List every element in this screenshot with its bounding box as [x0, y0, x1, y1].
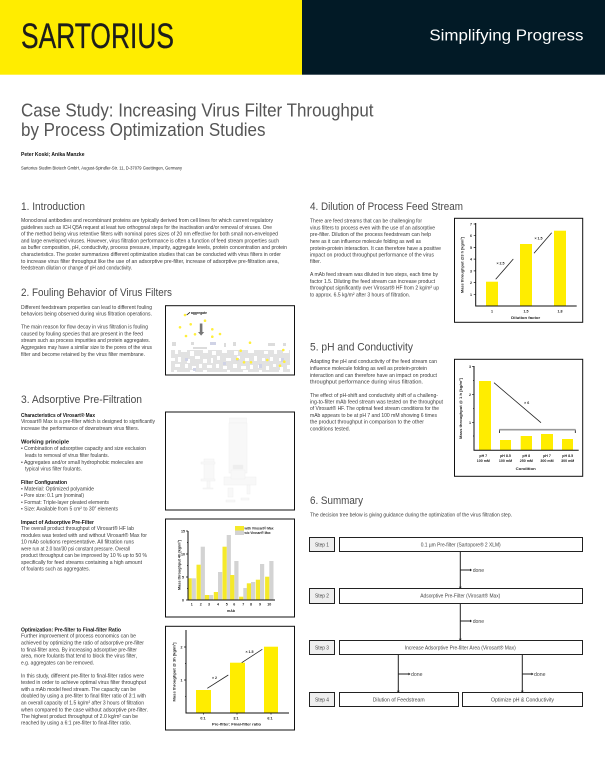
chart axes: pH 8: [522, 454, 530, 458]
section 2 text: Aggregates may have a similar size to the pores of the virus: [21, 345, 152, 351]
chart bars: [479, 381, 573, 450]
annotation: fold increases: × 1.5: [534, 236, 543, 240]
chart axes: pH 7: [479, 454, 487, 458]
section 3 text: filter configuration: • Size: Available from 5 cm² to 30″ elements: [21, 506, 118, 512]
section 3 text: optimization: achieved by optimizing the ratio of adsorptive pre-filter: [21, 640, 144, 646]
section 2 text: behaviors being observed during virus filtration operations.: [21, 312, 152, 318]
section 1 text: feedstream dilution or change of pH and conductivity.: [21, 266, 132, 272]
chart axes: 6:1: [267, 716, 273, 720]
chart axes: [172, 630, 289, 726]
chart axes: 0:1: [200, 716, 206, 720]
section 3 text: working principle: • Combination of adsorptive capacity and size exclusion: [21, 446, 146, 452]
section 1 text: and large enveloped viruses. However, virus filtration performance is often a function of feed stream properties such: [21, 238, 279, 244]
annotation: six-fold bracket: × 6: [524, 401, 529, 405]
step 2 label: [310, 588, 334, 604]
chart axes: pH 7: [543, 454, 551, 458]
chart axes: 3: [469, 365, 471, 369]
section 5 text: interaction and can therefore have an impact on product: [310, 373, 437, 379]
arrow: step 1 to step 2: done: [473, 568, 484, 574]
panel: fouling diagram: [166, 306, 294, 375]
section 5 text: ing-to-filter mAb feed stream was tested on the throughput: [310, 399, 444, 405]
section 1 text: of the method being virus retentive filters with nominal pores sizes of 20 nm effective for both small non-enveloped: [21, 232, 278, 238]
section 3 text: filter configuration: • Format: Triple-layer pleated elements: [21, 500, 109, 506]
section 3 text: impact: specifically for feed streams containing a high amount: [21, 560, 142, 566]
section 6 intro text: The decision tree below is giving guidance during the optimization of the virus filtration step.: [310, 512, 512, 518]
icon: small filter capsule: [201, 459, 215, 489]
section 5 text: of Virosart® HF. The optimal feed stream conditions for the: [310, 405, 439, 412]
section 4 text: pre-filter. Dilution of the process feedstream can help: [310, 232, 431, 238]
section 3 text: impact: product throughput can be improved by 10 % up to 50 %: [21, 553, 147, 559]
chart axes: 5: [470, 246, 472, 250]
section 1 text: as buffer composition, pH, conductivity, process pressure, impurity, aggregate levels, protein concentration and protein: [21, 245, 287, 251]
section 3 text: impact: The overall product throughput of Virosart® HF lab: [21, 525, 134, 532]
chart axes: 0: [182, 598, 184, 602]
annotation: fold increases: [496, 233, 552, 279]
chart axes: 250 mM: [520, 459, 533, 463]
step 3 label: [310, 640, 334, 654]
chart axes: Mass throughput @ 3h [kg/m²]: [172, 642, 176, 702]
chart axes: [459, 365, 579, 471]
affiliation: Sartorius Stedim Biotech GmbH, August-Spindler-Str. 11, D-37079 Goettingen, Germany: [21, 165, 183, 170]
chart legend: w/o Virosart® Max: [244, 531, 270, 535]
aggregate label: aggregate: [191, 311, 207, 315]
panel: pre-filter to final-filter ratio chart: [166, 626, 294, 730]
section 4 text: to approx. 6.5 kg/m² after 3 hours of filtration.: [310, 292, 410, 298]
chart axes: 7: [242, 602, 244, 606]
section 3 text: optimization: Further improvement of process economics can be: [21, 634, 136, 640]
section 3 text: working principle: Working principle: [21, 439, 69, 445]
chart axes: 2: [200, 602, 202, 606]
chart axes: Condition: [516, 467, 536, 471]
step 1 label: [310, 538, 334, 552]
chart axes: 4: [217, 602, 219, 606]
title: Case Study: Increasing Virus Filter Throughput: [21, 100, 374, 121]
chart axes: 6: [233, 602, 235, 606]
chart axes: pH 8.5: [562, 454, 573, 458]
section 3 text: optimization: with a mAb model feed stream. The capacity can be: [21, 687, 136, 693]
chart axes: mAb: [227, 609, 236, 613]
section 2 text: [21, 305, 152, 358]
section 3 text: optimization: reached by using a 6:1 pre-filter to final-filter ratio.: [21, 721, 131, 727]
chart bars: [196, 647, 278, 713]
chart axes: 2: [469, 393, 471, 397]
section 3 text: impact: were run at 2.0 bar/30 psi constant pressure. Overall: [21, 546, 130, 552]
title: by Process Optimization Studies: [21, 119, 266, 140]
step 2 box: Adsorptive Pre-Filter (Virosart® Max): [420, 592, 501, 600]
section 1 text: to increase virus filter throughput like the use of an adsorptive pre-filter, increase of adsorptive pre-filtration area,: [21, 259, 279, 265]
section 2 text: filter and become retained by the virus filter membrane.: [21, 352, 145, 358]
arrow: step 3 to dilution: [397, 655, 423, 692]
chart axes: pH 8.5: [500, 454, 511, 458]
section 4 text: impact on product throughput performance of the virus: [310, 252, 434, 258]
chart axes: 9: [259, 602, 261, 606]
arrow: step 3 to dilution: done: [411, 672, 423, 678]
section 4 text: factor 1.5. Diluting the feed stream can increase product: [310, 279, 435, 285]
authors: Peter Koski; Anika Manzke: [21, 152, 85, 158]
membrane pores: [171, 350, 290, 372]
chart legend: with Virosart® Max: [244, 526, 274, 530]
section 3 text: characteristics: increase the performance of downstream virus filters.: [21, 426, 139, 432]
panel: pH and conductivity chart: [454, 359, 583, 476]
decision tree: [310, 538, 582, 706]
chart axes: 100 mM: [499, 459, 512, 463]
step 4 label: Step 4: [315, 697, 329, 703]
chart bars: [486, 231, 566, 306]
chart axes: 5: [226, 602, 228, 606]
chart axes: 1: [469, 421, 471, 425]
section 2 text: The main reason for flow decay in virus filtration is fouling: [21, 325, 148, 331]
step 2 box: [340, 588, 582, 604]
section 5 text: The effect of pH-shift and conductivity shift of a challeng-: [310, 393, 438, 399]
chart axes: 300 mM: [561, 459, 574, 463]
chart axes: 8: [250, 602, 252, 606]
section 3 text: working principle: leads to removal of virus filter foulants.: [25, 453, 109, 459]
section 5 text: conditions tested.: [310, 426, 350, 432]
section 1 heading: 1. Introduction: [21, 201, 85, 213]
section 3 text: working principle: • Aggregates and/or small hydrophobic molecules are: [21, 460, 143, 466]
section 5 text: Adapting the pH and conductivity of the feed stream can: [310, 359, 437, 365]
chart axes: 3: [208, 602, 210, 606]
chart axes: Dilution factor: [511, 316, 541, 320]
section 3 text: impact: modules was tested with and without Virosart® Max for: [21, 532, 147, 539]
step 1 box: [340, 538, 582, 552]
section 2 heading: 2. Fouling Behavior of Virus Filters: [21, 287, 172, 299]
section 3 text: optimization: area, more foulants that tend to block the virus filter,: [21, 654, 137, 660]
section 3 text: characteristics: Characteristics of Virosart® Max: [21, 412, 95, 419]
section 3 text: optimization: to final-filter area. By increasing adsorptive pre-filter: [21, 648, 137, 654]
chart legend: [235, 526, 274, 535]
section 3 text: optimization: [21, 628, 148, 727]
section 5 text: mAb appears to be at pH 7 and 100 mM showing 6 times: [310, 413, 437, 419]
step 1 box: 0.1 µm Pre-filter (Sartopore® 2 XLM): [421, 541, 501, 548]
icon: large filter capsule: [224, 418, 256, 502]
section 3 text: impact: [21, 520, 147, 572]
chart axes: [178, 530, 275, 613]
panel: throughput bar chart by mAb: [166, 519, 294, 617]
chart axes: Mass throughput @ 1 h [kg/m²]: [459, 378, 463, 439]
arrow: step 3 to pH and conductivity: done: [534, 672, 546, 678]
section 3 text: optimization: when compared to the case without adsorptive pre-filter.: [21, 707, 148, 713]
chart axes: Mass throughput @3 h [kg/m²]: [460, 237, 464, 293]
section 5 text: the product throughput in comparison to the other: [310, 419, 424, 425]
section 4 text: [310, 219, 441, 298]
section 2 text: stream such as process impurities and protein aggregates.: [21, 338, 150, 344]
arrow: step 3 to pH and conductivity: [521, 655, 546, 692]
step 4 box: pH and conductivity: [462, 692, 582, 706]
step 4 label: [310, 692, 334, 706]
section 3 text: optimization: The highest product throughput of 2.0 kg/m² can be: [21, 714, 138, 720]
chart axes: 1: [470, 293, 472, 297]
chart axes: 4: [470, 258, 472, 262]
chart axes: 1: [180, 678, 182, 682]
section 3 text: impact: of foulants such as aggregates.: [21, 566, 90, 572]
section 3 text: impact: 10 mAb solutions representative. All filtration runs: [21, 540, 134, 546]
step 3 box: Increase Adsorptive Pre-filter Area (Virosart® Max): [405, 644, 516, 651]
annotation: fold increases: × 2: [212, 676, 217, 680]
section 3 text: optimization: In this study, different pre-filter to final-filter ratios were: [21, 674, 144, 680]
panel: filter device image: [166, 412, 294, 510]
chart axes: 10: [181, 552, 185, 556]
section 3 text: characteristics: [21, 412, 155, 432]
section 4 text: filter.: [310, 259, 321, 265]
step 4 box: dilution: Dilution of Feedstream: [373, 697, 425, 703]
step 4 box: dilution: [340, 692, 458, 706]
section 1 text: [21, 218, 287, 272]
panel: dilution factor chart: [454, 218, 583, 322]
tagline: Simplifying Progress: [429, 28, 583, 45]
step 3 box: [340, 640, 582, 654]
section 5 text: [310, 359, 444, 432]
chart axes: Pre-filter: Final-filter ratio: [212, 722, 262, 726]
aggregates: [179, 314, 286, 367]
step 3 label: Step 3: [315, 645, 329, 651]
arrow: step 2 to step 3: done: [473, 619, 484, 625]
section 6 heading: 6. Summary: [310, 495, 363, 507]
arrow: step 2 to step 3: [459, 603, 484, 640]
section 3 text: optimization: doubled by using a pre-filter to final filter ratio of 3:1 with: [21, 694, 146, 700]
section 3 text: optimization: tested in order to achieve optimal virus filter throughput: [21, 680, 147, 686]
chart axes: 1: [491, 310, 493, 314]
section 5 text: throughput performance during virus filtration.: [310, 380, 423, 386]
section 3 text: impact: Impact of Adsorptive Pre-Filter: [21, 520, 94, 526]
annotation: fold increases: × 2.5: [496, 262, 505, 266]
step 1 label: Step 1: [315, 542, 329, 548]
annotation: fold increases: [207, 649, 262, 688]
chart axes: 3:1: [233, 716, 239, 720]
section 4 text: here as it can influence molecule folding as well as: [310, 239, 421, 245]
section 3 text: working principle: typical virus filter foulants.: [25, 466, 82, 472]
title: [21, 100, 374, 140]
section 2 text: caused by fouling species that are present in the feed: [21, 332, 143, 338]
section 3 text: optimization: Optimization: Pre-filter to Final-filter Ratio: [21, 628, 122, 634]
chart axes: 300 mM: [540, 459, 554, 463]
chart axes: 1.8: [558, 310, 562, 314]
section 3 text: characteristics: Virosart® Max is a pre-filter which is designed to significantly: [21, 418, 155, 425]
section 4 text: There are feed streams that can be challenging for: [310, 219, 422, 225]
chart axes: 10: [267, 602, 271, 606]
section 4 text: virus filters to process even with the use of an adsorptive: [310, 225, 435, 231]
chart axes: 1: [191, 602, 193, 606]
header band: [0, 0, 605, 75]
step 4 box: pH and conductivity: Optimize pH & Conductivity: [491, 697, 554, 703]
chart axes: [460, 222, 577, 320]
section 4 text: throughput significantly over Virosart® HF from 2 kg/m² up: [310, 285, 439, 292]
chart axes: 7: [470, 222, 472, 226]
section 2 text: Different feedstream properties can lead to different fouling: [21, 305, 152, 311]
chart axes: 6: [470, 234, 472, 238]
section 1 text: characteristics. The poster summarizes different optimization studies that can be conducted with virus filters in order: [21, 252, 281, 258]
section 4 text: protein-protein interaction. It can therefore have a positive: [310, 246, 441, 252]
section 4 text: A mAb feed stream was diluted in two steps, each time by: [310, 272, 438, 278]
chart axes: 100 mM: [477, 459, 490, 463]
section 1 text: guidelines such as ICH Q5A request at least two orthogonal steps for the inactivation and/or removal of viruses. One: [21, 225, 272, 231]
section 4 heading: 4. Dilution of Process Feed Stream: [310, 201, 463, 213]
annotation: fold increases: × 1.5: [245, 650, 254, 654]
step 2 label: Step 2: [315, 594, 329, 600]
section 3 text: filter configuration: [21, 480, 118, 512]
arrow: flow direction: [198, 324, 204, 336]
logo: Sartorius: SARTORIUS: [21, 17, 174, 56]
section 3 text: filter configuration: • Pore size: 0.1 µm (nominal): [21, 493, 84, 499]
arrow: step 1 to step 2: [459, 552, 484, 588]
chart axes: 15: [181, 530, 185, 534]
chart axes: 2: [180, 646, 182, 650]
section 3 heading: 3. Adsorptive Pre-Filtration: [21, 394, 142, 406]
section 5 text: influence molecule folding as well as protein-protein: [310, 366, 427, 372]
chart bars: [188, 535, 274, 600]
section 3 text: filter configuration: • Material: Optimized polyamide: [21, 486, 94, 492]
section 1 text: Monoclonal antibodies and recombinant proteins are typically derived from cell lines for which current regulatory: [21, 218, 273, 224]
chart axes: 2: [470, 281, 472, 285]
section 3 text: filter configuration: Filter Configuration: [21, 480, 67, 486]
section 3 text: optimization: an overall capacity of 1.5 kg/m² after 3 hours of filtration: [21, 700, 144, 706]
chart axes: 3: [470, 269, 472, 273]
section 5 heading: 5. pH and Conductivity: [310, 341, 413, 353]
section 3 text: optimization: e.g. aggregates can be removed.: [21, 660, 94, 666]
section 3 text: working principle: [21, 439, 146, 472]
chart axes: 5: [182, 576, 184, 580]
chart axes: 1.5: [524, 310, 528, 314]
chart axes: Mass throughput 4h [kg/m²]: [178, 540, 182, 590]
